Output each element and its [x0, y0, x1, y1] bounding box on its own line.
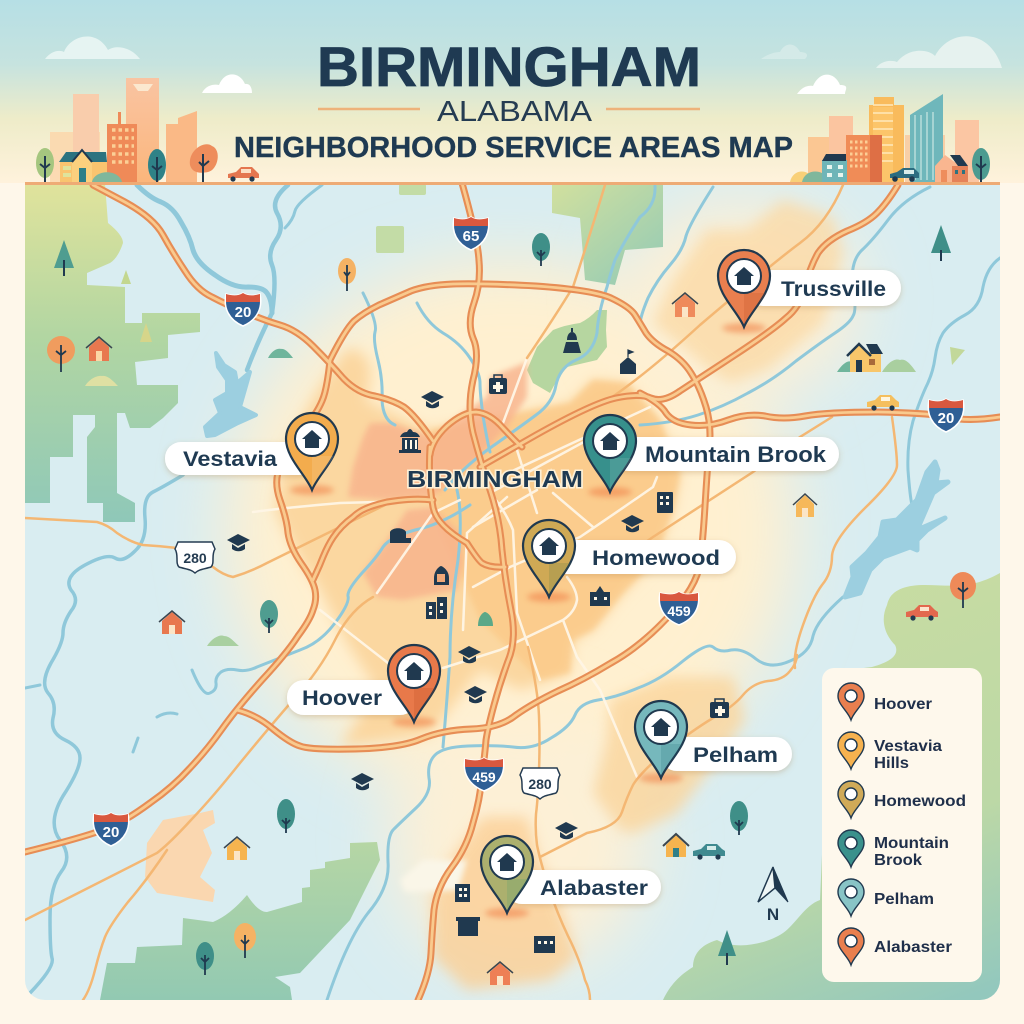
header baseline	[25, 182, 1000, 185]
shield: I-65: 65	[463, 228, 479, 245]
pin: Hoover	[388, 645, 440, 722]
legend: Pelham: Pelham	[874, 891, 934, 908]
label: Trussville	[745, 270, 901, 306]
shield: I-20 northwest: 20	[235, 304, 251, 321]
green park: southwest	[100, 842, 380, 1000]
shield: I-459 south	[464, 758, 504, 791]
shield: US-280 south	[520, 768, 560, 799]
title: Neighborhood Service Areas Map: NEIGHBORHOOD SERVICE AREAS MAP	[234, 132, 793, 164]
label: Hoover	[287, 680, 417, 715]
pin: Alabaster	[481, 836, 533, 913]
pin: Trussville	[718, 250, 770, 327]
shield: US-280 west	[175, 542, 215, 573]
legend: Mountain Brook	[838, 830, 949, 869]
legend: Vestavia Hills	[838, 732, 942, 772]
right skyline	[790, 94, 990, 182]
legend: Hoover: Hoover	[874, 696, 932, 713]
shield: I-20 northwest	[225, 293, 261, 326]
pin: Pelham	[635, 701, 687, 778]
building and landmark icons	[227, 328, 729, 953]
label: Hoover: Hoover	[302, 687, 382, 710]
label: Mountain Brook: Mountain Brook	[645, 442, 827, 467]
icon details	[405, 382, 725, 944]
shield: I-20 southwest	[93, 813, 129, 846]
legend: Vestavia Hills: Vestavia	[874, 738, 942, 755]
rivers	[25, 185, 1000, 1000]
header sky	[0, 0, 1024, 183]
legend: Alabaster: Alabaster	[874, 939, 952, 956]
trees	[47, 225, 976, 975]
shield: I-459 south: 459	[472, 769, 496, 785]
label: Alabaster: Alabaster	[540, 877, 648, 900]
legend: Mountain Brook: Mountain	[874, 835, 949, 852]
shield: I-20 east	[928, 399, 964, 432]
label: Vestavia	[165, 442, 315, 475]
green park: north	[552, 184, 663, 285]
thin orange local roads	[24, 185, 897, 1000]
green park: west	[25, 184, 200, 522]
label: Mountain Brook	[612, 437, 839, 471]
label: Homewood: Homewood	[592, 547, 720, 570]
legend panel	[822, 668, 982, 982]
label: Alabaster	[505, 870, 661, 904]
legend: Mountain Brook: Brook	[874, 852, 922, 869]
legend: Alabaster	[838, 928, 952, 965]
highways	[25, 183, 1000, 1000]
shield: US-280 west: 280	[183, 550, 207, 566]
legend: Homewood	[838, 781, 966, 818]
legend: Hoover	[838, 683, 932, 720]
label: Vestavia: Vestavia	[183, 448, 277, 471]
city label: Birmingham: BIRMINGHAM	[407, 466, 583, 492]
pin: Mountain Brook	[584, 415, 636, 492]
lake: east	[845, 462, 948, 597]
cars	[693, 395, 938, 860]
pin shadows	[290, 323, 766, 918]
legend: Homewood: Homewood	[874, 793, 966, 810]
label: Pelham: Pelham	[693, 744, 778, 767]
lake: west	[205, 353, 256, 436]
legend: Vestavia Hills: Hills	[874, 755, 909, 772]
green park: central	[527, 310, 607, 393]
label: Pelham	[660, 737, 792, 771]
map panel	[24, 183, 1000, 1000]
clouds	[45, 36, 1002, 94]
shield: I-20 east: 20	[938, 410, 954, 427]
shield: I-20 southwest: 20	[103, 824, 119, 841]
service area blobs	[145, 200, 843, 990]
shield: I-459 east	[659, 592, 699, 625]
title: Birmingham: BIRMINGHAM	[317, 35, 701, 98]
houses	[86, 293, 883, 985]
shield: I-65	[453, 217, 489, 250]
label: Trussville: Trussville	[781, 278, 886, 301]
shield: I-459 east: 459	[667, 603, 691, 619]
green park: southeast	[663, 573, 1000, 1000]
left skyline	[50, 78, 197, 182]
shield: US-280 south: 280	[528, 776, 552, 792]
pin: Homewood	[523, 520, 575, 597]
pin: Vestavia	[286, 413, 338, 490]
compass: N	[767, 905, 779, 924]
label: Homewood	[550, 540, 736, 574]
compass	[758, 867, 788, 924]
small green patch	[950, 347, 965, 365]
header trees and car left	[36, 144, 259, 182]
green park: small north	[376, 184, 426, 253]
minor white streets	[253, 358, 657, 777]
legend: Pelham	[838, 879, 934, 916]
subtitle: Alabama: ALABAMA	[437, 96, 593, 128]
